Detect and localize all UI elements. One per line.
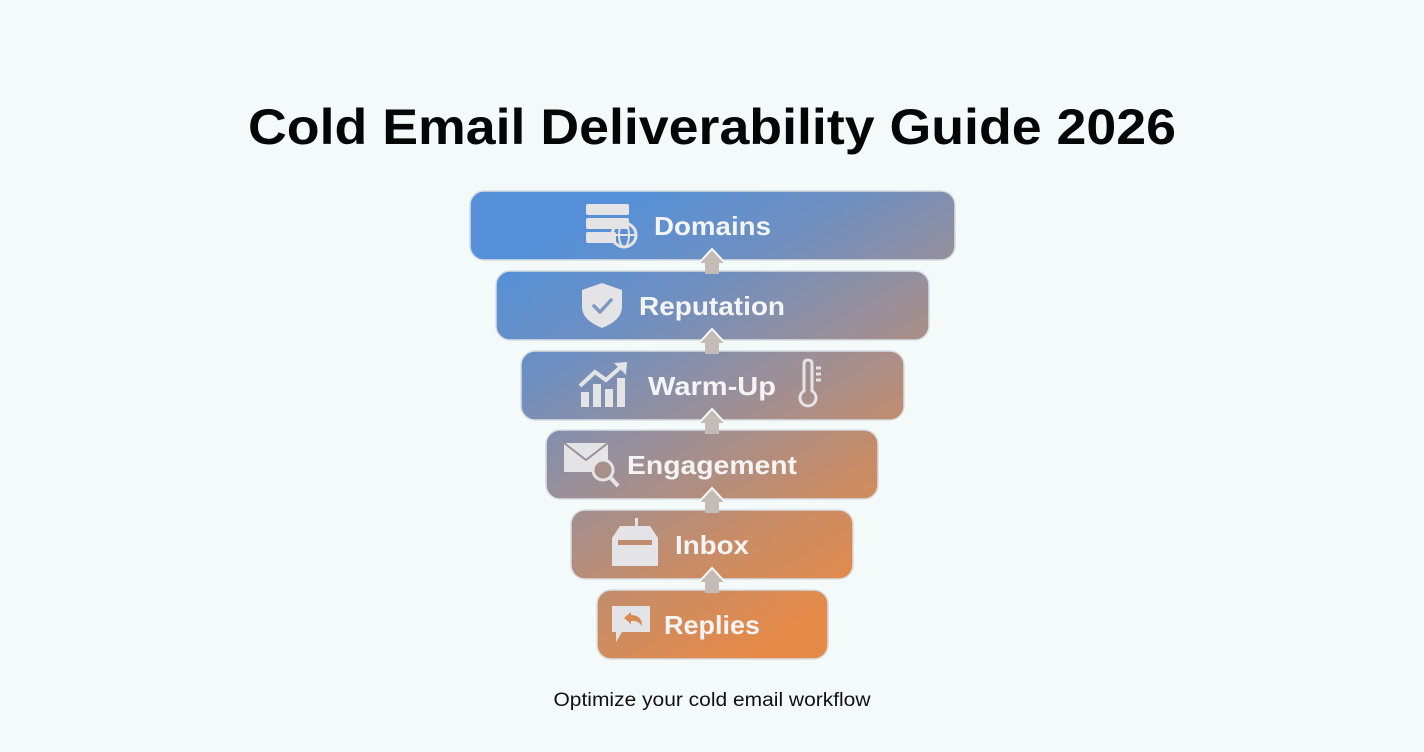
subtitle: Optimize your cold email workflow [554, 690, 871, 711]
icon: shield check [582, 283, 622, 328]
funnel [470, 191, 955, 659]
bar: Replies [597, 590, 828, 659]
bar: Engagement: Engagement [627, 450, 797, 480]
bar: Inbox [571, 510, 853, 579]
bar: Reputation: Reputation [639, 291, 785, 321]
arrows between bars [698, 249, 726, 593]
bar: Inbox: Inbox [675, 530, 750, 560]
icon: growth chart [580, 362, 627, 407]
icon: reply bubble [612, 606, 650, 642]
bar: Warm-Up [521, 351, 904, 420]
bar: Warm-Up: Warm-Up [648, 371, 776, 401]
title: Cold Email Deliverability Guide 2026 [248, 99, 1176, 155]
icon: inbox tray [612, 518, 658, 566]
icon: server globe [586, 204, 636, 247]
bar: Domains: Domains [654, 211, 771, 241]
icon: thermometer [800, 360, 821, 406]
bar: Domains [470, 191, 955, 260]
bar: Replies: Replies [664, 610, 760, 640]
bar: Reputation [496, 271, 929, 340]
icon: envelope search [564, 443, 618, 486]
bar: Engagement [546, 430, 878, 499]
